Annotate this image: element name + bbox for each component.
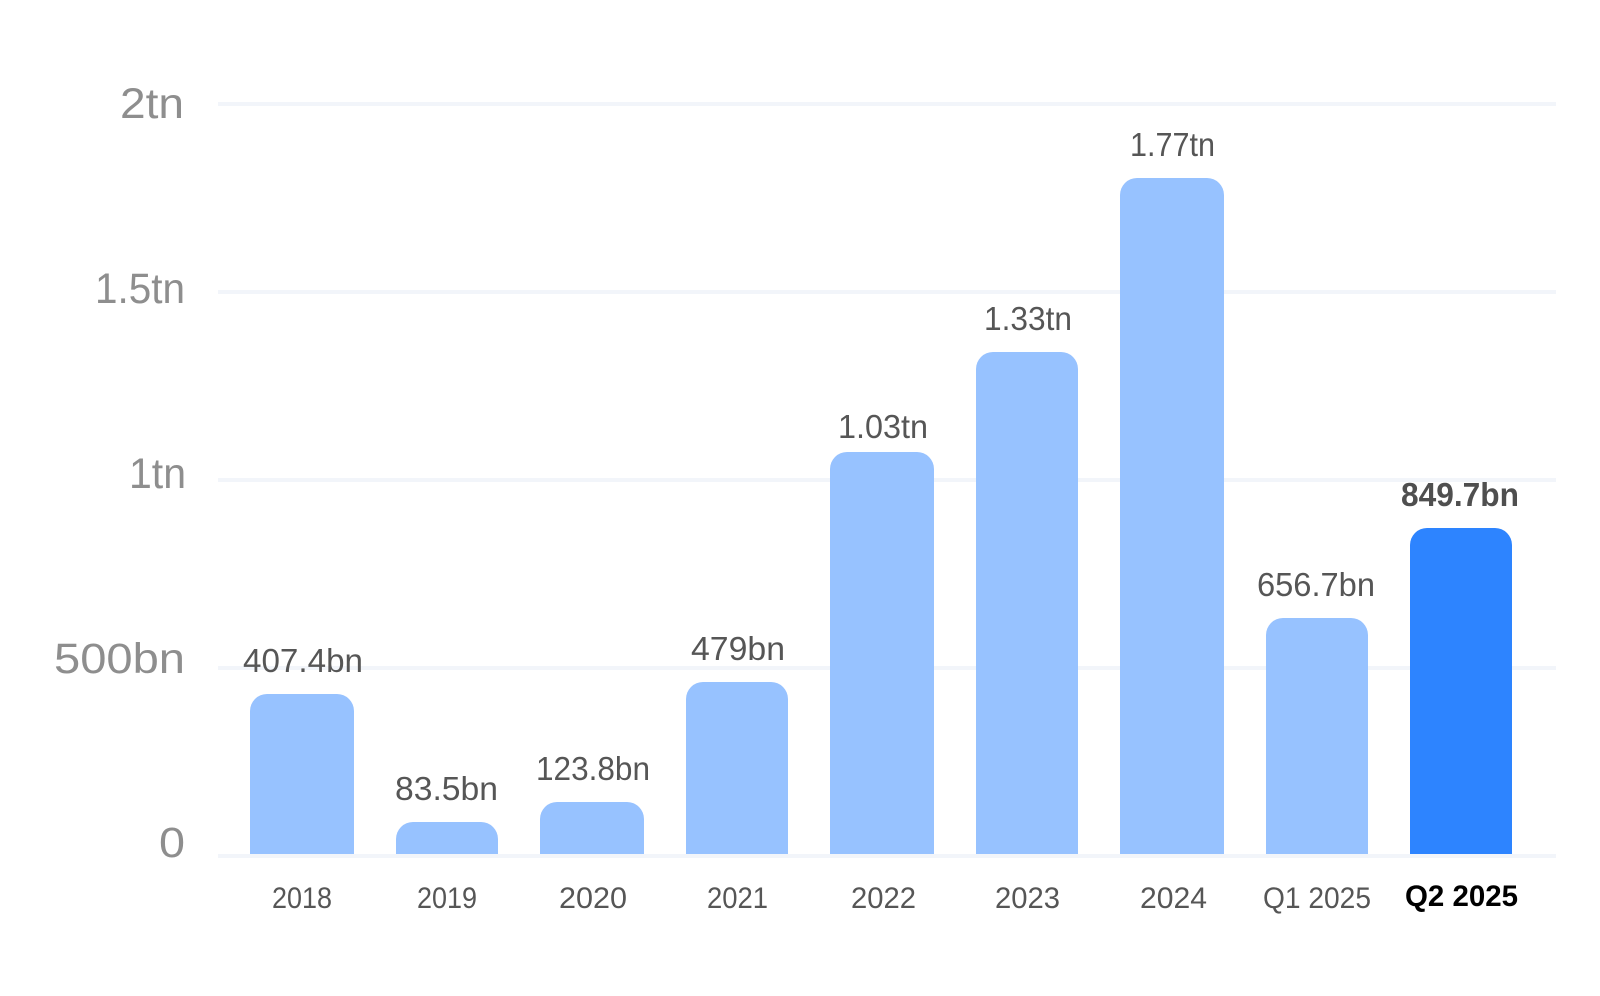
x axis labels: 2020 [559,882,627,915]
value labels: 1.77tn [1130,126,1215,163]
bar: 2020 [540,802,644,854]
x axis labels: 2018 [272,882,332,915]
value labels: 83.5bn [395,770,498,807]
x axis labels: 2023 [995,882,1060,915]
y axis labels: 500bn [54,635,185,683]
bar: Q2 2025 highlighted [1410,528,1512,854]
bars [250,178,1512,854]
x axis labels: 2022 [851,882,916,915]
y axis labels: 0 [159,819,185,867]
value labels: 849.7bn [1401,476,1519,513]
value labels: 1.33tn [984,300,1072,337]
y axis labels [54,80,186,867]
x axis labels: 2021 [707,882,768,915]
bar: 2019 [396,822,498,854]
x axis labels: Q2 2025 [1405,880,1518,913]
y axis labels: 1.5tn [95,265,185,313]
bar: 2023 [976,352,1078,854]
value labels: 123.8bn [536,750,650,787]
x axis labels: Q1 2025 [1263,882,1371,915]
x axis labels: 2019 [417,882,477,915]
y axis labels: 1tn [129,450,186,498]
value labels [243,126,1519,807]
x axis labels: 2024 [1140,882,1207,915]
y axis labels: 2tn [120,80,184,128]
bar: Q1 2025 [1266,618,1368,854]
value labels: 407.4bn [243,642,363,679]
bar: 2022 [830,452,934,854]
bar: 2024 [1120,178,1224,854]
value labels: 479bn [691,630,785,667]
bar: 2021 [686,682,788,854]
value labels: 656.7bn [1257,566,1375,603]
value labels: 1.03tn [838,408,928,445]
bar: 2018 [250,694,354,854]
x axis labels [272,880,1518,915]
